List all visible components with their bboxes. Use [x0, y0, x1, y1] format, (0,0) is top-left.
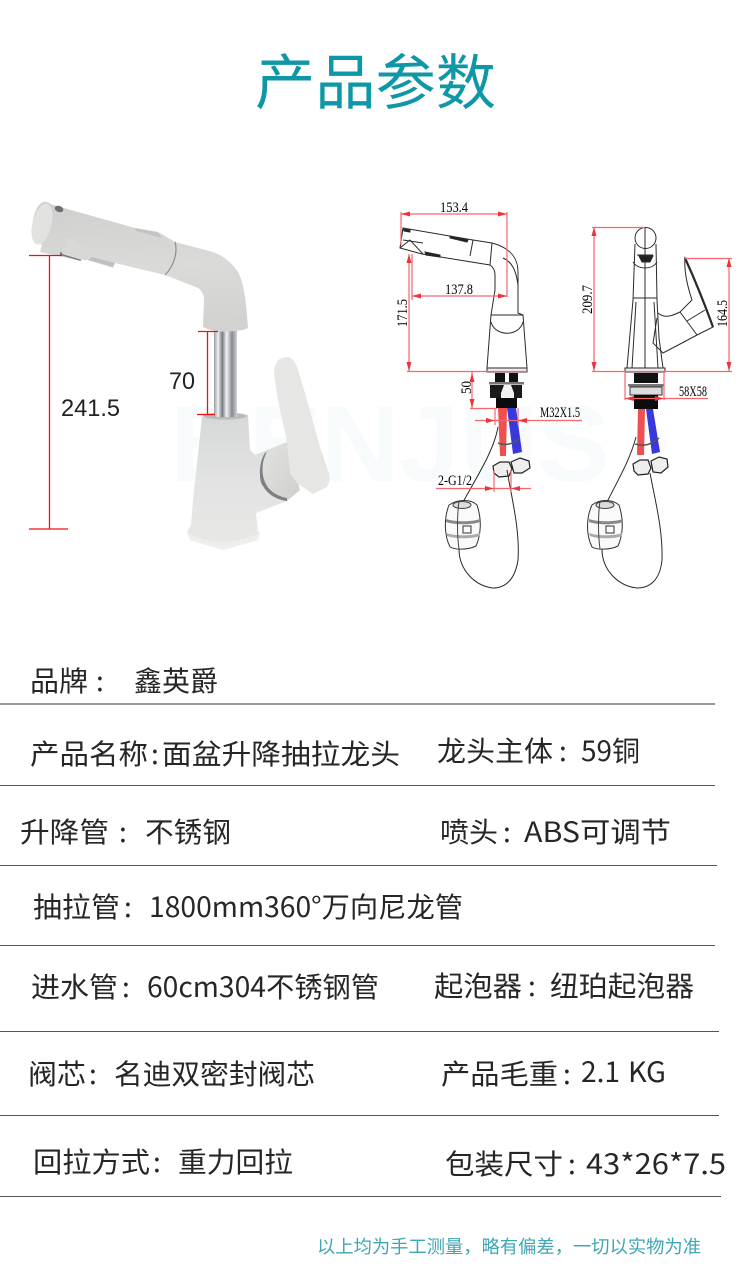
spec row: brand: 鑫英爵	[134, 660, 218, 700]
spec row: pull hose: 抽拉管	[33, 886, 120, 926]
front view outline	[625, 227, 713, 372]
spec row: return mode and package size: :	[568, 1143, 576, 1183]
front view dimensions	[580, 227, 732, 401]
spec row: brand: :	[96, 660, 104, 700]
title: 产品参数	[255, 35, 496, 122]
faucet photo	[28, 201, 330, 550]
side view dimensions: 171.5	[395, 299, 411, 327]
spout	[32, 202, 248, 332]
side view dimensions: 137.8	[445, 282, 473, 298]
front view dimensions: 164.5	[715, 300, 731, 327]
side view hoses	[493, 408, 530, 477]
front view hoses	[633, 409, 668, 475]
faucet base	[187, 415, 287, 550]
spec row: return mode and package size: :	[153, 1141, 161, 1181]
spec row: lift tube and spray head: 升降管	[20, 811, 109, 851]
spec row: name and body: 面盆升降抽拉龙头	[162, 733, 400, 773]
spec row: valve core and weight: 2.1	[581, 1051, 620, 1091]
spec row: name and body: 产品名称	[30, 733, 148, 773]
side view dimensions: 153.4	[440, 200, 468, 216]
spec row: inlet hose and aerator: :	[122, 966, 130, 1006]
dimension: 70: 70	[169, 368, 195, 395]
spec row: valve core and weight: 产品毛重	[441, 1053, 558, 1093]
side view mounting	[489, 373, 524, 408]
spec row: return mode and package size: 回拉方式	[33, 1141, 150, 1181]
front view control cable and box	[588, 437, 662, 588]
spec row: name and body: 59铜	[581, 730, 640, 770]
spec row: inlet hose and aerator: 起泡器	[434, 965, 522, 1005]
footnote: 以上均为手工测量，略有偏差，一切以实物为准	[317, 1233, 701, 1259]
spec row: inlet hose and aerator: :	[528, 965, 536, 1005]
spec row: lift tube and spray head: ABS可调节	[524, 811, 671, 851]
spec row: lift tube and spray head: :	[119, 811, 127, 851]
spec row: valve core and weight: :	[89, 1053, 97, 1093]
spec row: valve core and weight: 阀芯	[28, 1053, 86, 1093]
spec row: name and body: :	[151, 733, 159, 773]
spec row: lift tube and spray head: :	[503, 811, 511, 851]
spec row: name and body	[0, 730, 715, 786]
spec row: pull hose: :	[124, 886, 132, 926]
side view control cable and box	[445, 427, 518, 588]
spec row: valve core and weight	[0, 1051, 719, 1116]
side view dimensions: 50	[459, 381, 475, 394]
spec row: name and body: 龙头主体	[437, 730, 553, 770]
spec row: name and body: :	[559, 730, 567, 770]
spec row: lift tube and spray head: 不锈钢	[145, 811, 231, 851]
spec row: return mode and package size: 43*26*7.5	[586, 1143, 726, 1183]
spec row: valve core and weight: :	[563, 1053, 571, 1093]
spec row: inlet hose and aerator: 60cm304不锈钢管	[147, 966, 379, 1006]
front view dimensions: 209.7	[580, 285, 596, 314]
nozzle and buttons	[60, 252, 81, 261]
lever handle	[274, 357, 330, 494]
spec row: lift tube and spray head	[0, 811, 717, 866]
side view outline	[400, 228, 527, 372]
spec row: inlet hose and aerator: 纽珀起泡器	[550, 965, 694, 1005]
spec row: return mode and package size	[0, 1141, 726, 1196]
spec row: valve core and weight: 名迪双密封阀芯	[114, 1053, 315, 1093]
handle arm	[262, 442, 300, 501]
spec row: lift tube and spray head: 喷头	[440, 811, 498, 851]
spec row: return mode and package size: 包装尺寸	[445, 1143, 563, 1183]
spec row: return mode and package size: 重力回拉	[178, 1141, 293, 1181]
side view dimensions: 2-G1/2	[438, 473, 472, 489]
front view dimensions: 58X58	[679, 384, 707, 400]
spray head cap	[28, 201, 56, 247]
technical drawing: side view	[395, 200, 582, 588]
spec row: brand	[0, 660, 715, 704]
watermark: BENJUS	[170, 383, 610, 504]
spec row: pull hose	[0, 886, 715, 946]
spec row: inlet hose and aerator: 进水管	[31, 966, 118, 1006]
spec row: valve core and weight: KG	[628, 1051, 666, 1091]
front view mounting	[628, 373, 664, 409]
dimension: 241.5: 241.5	[61, 395, 120, 422]
side view dimensions	[395, 200, 582, 492]
spec row: brand: 品牌	[30, 660, 88, 700]
chrome lift tube	[214, 328, 237, 418]
spec row: inlet hose and aerator	[0, 965, 719, 1032]
side view dimensions: M32X1.5	[540, 405, 580, 421]
dimension: 241.5	[29, 256, 120, 529]
technical drawing: front view	[580, 227, 732, 588]
dimension: 70	[169, 332, 218, 414]
spec row: pull hose: 1800mm360°万向尼龙管	[149, 886, 463, 926]
